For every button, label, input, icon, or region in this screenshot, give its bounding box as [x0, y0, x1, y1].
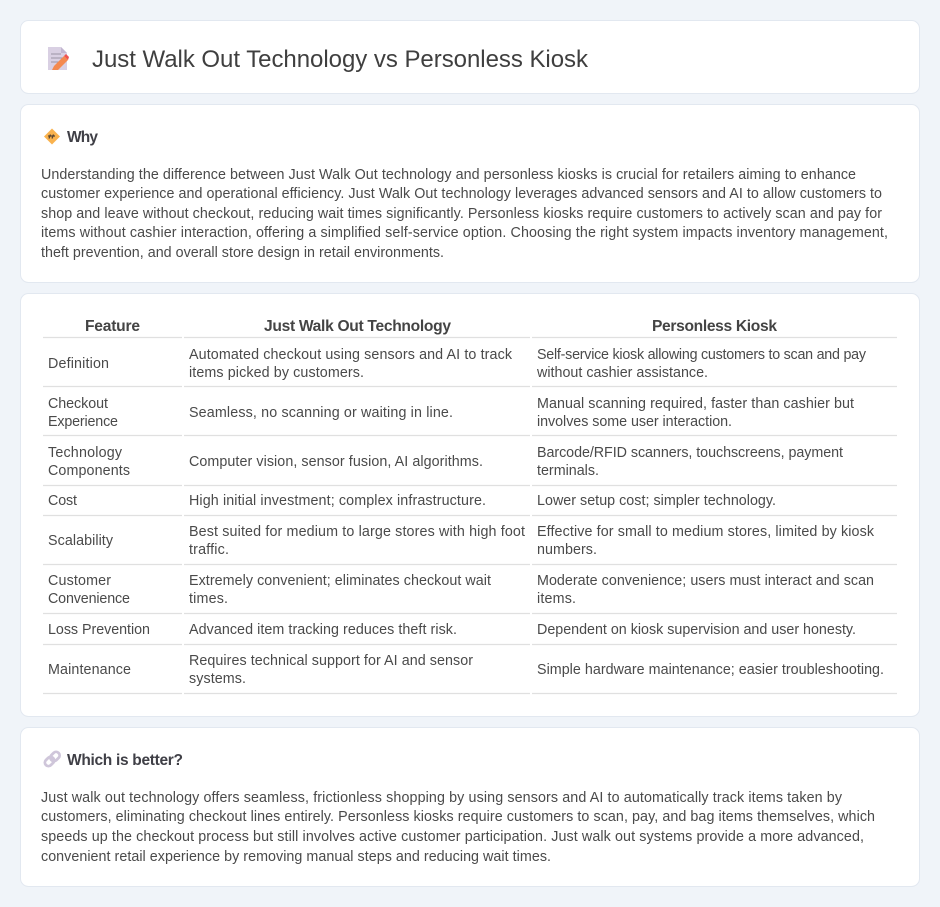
icon: warning diamond — [44, 128, 60, 144]
icon: memo and pencil — [48, 47, 69, 70]
table header — [85, 318, 777, 335]
row: scalability — [48, 524, 875, 558]
panel: why — [20, 104, 920, 282]
panel: which is better — [20, 728, 920, 886]
row: scalability: numbers. — [537, 542, 597, 558]
icon: link — [43, 750, 61, 768]
row: customer convenience: Extremely convenient; eliminates checkout wait — [189, 573, 491, 589]
row: customer convenience — [48, 573, 874, 607]
text block: which is better paragraph: convenient retail experience by removing manual steps and reducing wait times. — [41, 849, 551, 865]
row: technology components: Components — [48, 463, 130, 479]
row: cost: High initial investment; complex infrastructure. — [189, 493, 486, 509]
row: maintenance: Simple hardware maintenance; easier troubleshooting. — [537, 662, 884, 678]
panel: comparison table — [20, 294, 920, 716]
heading: why: Why — [67, 129, 98, 146]
row: checkout experience — [48, 396, 854, 430]
text block: which is better paragraph: customers, eliminating checkout lines entirely. Personless kiosks require customers to scan, pay, and bag items themselves, which — [41, 809, 875, 825]
title: Just Walk Out Technology vs Personless Kiosk — [92, 46, 589, 73]
row: customer convenience: items. — [537, 591, 576, 607]
text block: why paragraph: Understanding the difference between Just Walk Out technology and personless kiosks is crucial for retailers aiming to enhance — [41, 167, 856, 183]
row: loss prevention: Advanced item tracking reduces theft risk. — [189, 622, 457, 638]
row: customer convenience: times. — [189, 591, 228, 607]
row: customer convenience: Customer — [48, 573, 111, 589]
heading: which is better: Which is better? — [67, 752, 183, 769]
row: checkout experience: Experience — [48, 414, 118, 430]
row: technology components: Barcode/RFID scanners, touchscreens, payment — [537, 445, 843, 461]
row: customer convenience: Moderate convenience; users must interact and scan — [537, 573, 874, 589]
text block: which is better paragraph: speeds up the checkout process but still involves active customer participation. Just walk out systems provide a more advanced, — [41, 829, 864, 845]
table header: Personless Kiosk — [652, 318, 777, 335]
row: technology components: Computer vision, sensor fusion, AI algorithms. — [189, 454, 483, 470]
row: scalability: Best suited for medium to large stores with high foot — [189, 524, 525, 540]
row: scalability: Scalability — [48, 533, 114, 549]
row: cost: Cost — [48, 493, 77, 509]
row: definition: items picked by customers. — [189, 365, 364, 381]
text block: why paragraph: customer experience and operational efficiency. Just Walk Out technology leverages advanced sensors and AI to allow customers to — [41, 186, 882, 202]
table header: Just Walk Out Technology — [264, 318, 451, 335]
row: scalability: Effective for small to medium stores, limited by kiosk — [537, 524, 875, 540]
text block: why paragraph — [41, 167, 888, 261]
panel: header — [20, 20, 920, 94]
row: cost: Lower setup cost; simpler technology. — [537, 493, 776, 509]
row: checkout experience: Manual scanning required, faster than cashier but — [537, 396, 854, 412]
table header: Feature — [85, 318, 140, 335]
row: loss prevention: Dependent on kiosk supervision and user honesty. — [537, 622, 856, 638]
text block: why paragraph: theft prevention, and overall store design in retail environments. — [41, 245, 444, 261]
row: technology components: terminals. — [537, 463, 599, 479]
row: checkout experience: involves some user interaction. — [537, 414, 732, 430]
row: technology components — [48, 445, 843, 479]
row: technology components: Technology — [48, 445, 123, 461]
row: definition — [48, 347, 867, 381]
row: maintenance: Requires technical support for AI and sensor — [189, 653, 473, 669]
row: checkout experience: Checkout — [48, 396, 108, 412]
row: checkout experience: Seamless, no scanning or waiting in line. — [189, 405, 453, 421]
row: definition: Definition — [48, 356, 109, 372]
row: customer convenience: Convenience — [48, 591, 130, 607]
row: loss prevention: Loss Prevention — [48, 622, 150, 638]
row: maintenance: Maintenance — [48, 662, 131, 678]
row: definition: Automated checkout using sensors and AI to track — [189, 347, 513, 363]
row: cost — [48, 493, 776, 509]
row: definition: without cashier assistance. — [536, 365, 708, 381]
text block: which is better paragraph — [41, 790, 875, 865]
row: loss prevention — [48, 622, 856, 638]
text block: why paragraph: items without cashier interaction, offering a simplified self-service option. Choosing the right system impacts inventory management, — [41, 225, 888, 241]
row: maintenance — [48, 653, 884, 687]
text block: why paragraph: shop and leave without checkout, reducing wait times significantly. Personless kiosks require customers to actively scan and pay for — [41, 206, 882, 222]
row: definition: Self-service kiosk allowing customers to scan and pay — [537, 347, 867, 363]
row: scalability: traffic. — [189, 542, 229, 558]
text block: which is better paragraph: Just walk out technology offers seamless, frictionless shopping by using sensors and AI to automatically track items taken by — [41, 790, 843, 806]
row: maintenance: systems. — [189, 671, 246, 687]
